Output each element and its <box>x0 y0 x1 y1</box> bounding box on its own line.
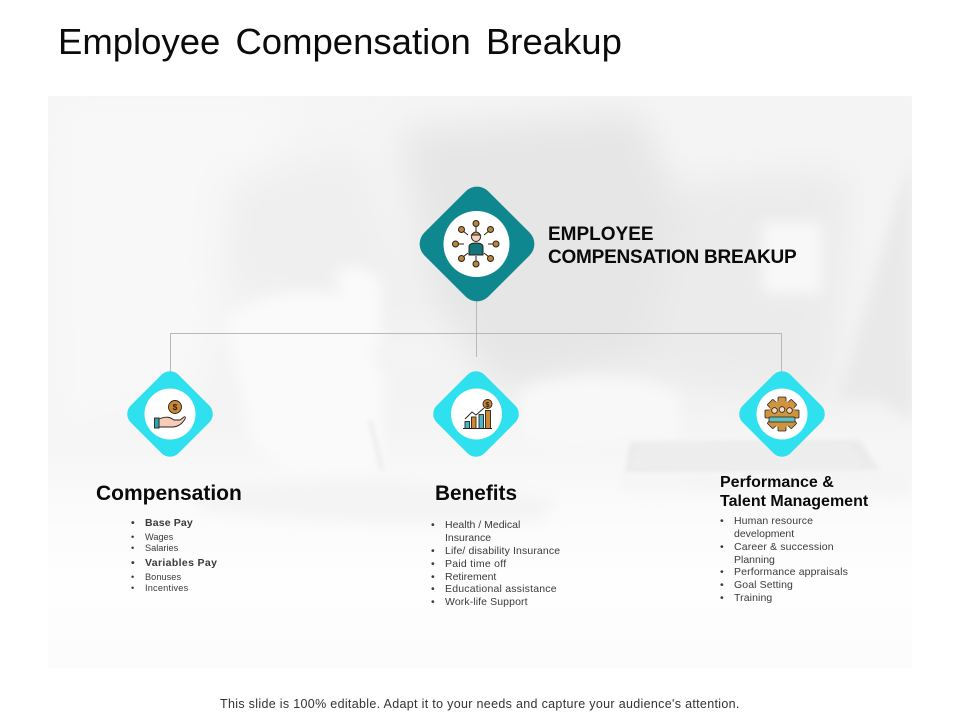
list: Performance items: Goal Setting <box>734 579 793 591</box>
list: Compensation items: Variables Pay <box>145 557 217 569</box>
heading: Performance & Talent Management <box>720 474 868 510</box>
list: Benefits items: Health / Medical <box>445 519 520 531</box>
list: Compensation items: Incentives <box>145 583 188 593</box>
list: Performance items: Career & succession <box>734 541 834 553</box>
icon: person network <box>452 220 499 267</box>
list: Performance items: Human resource <box>734 515 813 527</box>
heading: Performance & Talent Management: Talent Management <box>720 493 868 510</box>
title: Employee Compensation Breakup <box>58 21 622 62</box>
list: Compensation items <box>131 517 217 593</box>
list: Performance items <box>720 515 848 604</box>
list: Benefits items: Paid time off <box>445 558 506 570</box>
main heading: COMPENSATION BREAKUP <box>548 247 796 268</box>
center diamond icon: bar chart: $ <box>485 400 490 409</box>
footer note: This slide is 100% editable. Adapt it to your needs and capture your audience's attention. <box>220 697 740 711</box>
heading: Benefits: Benefits <box>435 482 517 505</box>
left diamond icon: hand with coin: $ <box>173 402 178 412</box>
list: Benefits items: Educational assistance <box>445 583 557 595</box>
list: Benefits items: Work-life Support <box>445 596 528 608</box>
background photo panel <box>48 96 912 522</box>
list: Benefits items: Life/ disability Insurance <box>445 545 560 557</box>
heading: Compensation: Compensation <box>96 482 242 505</box>
list: Performance items: Training <box>734 592 772 604</box>
list: Compensation items: Salaries <box>145 543 178 553</box>
list: Performance items: development <box>734 528 794 540</box>
list: Compensation items: Base Pay <box>145 517 193 529</box>
list: Compensation items: Wages <box>145 532 173 542</box>
list: Performance items: Performance appraisals <box>734 566 848 578</box>
list: Benefits items: Insurance <box>445 532 491 544</box>
main heading <box>548 224 796 268</box>
list: Performance items: Planning <box>734 554 775 566</box>
main heading: EMPLOYEE <box>548 224 654 245</box>
list: Benefits items: Retirement <box>445 571 496 583</box>
list: Compensation items: Bonuses <box>145 572 181 582</box>
heading: Performance & Talent Management: Performance & <box>720 474 834 491</box>
list: Benefits items <box>431 519 560 608</box>
